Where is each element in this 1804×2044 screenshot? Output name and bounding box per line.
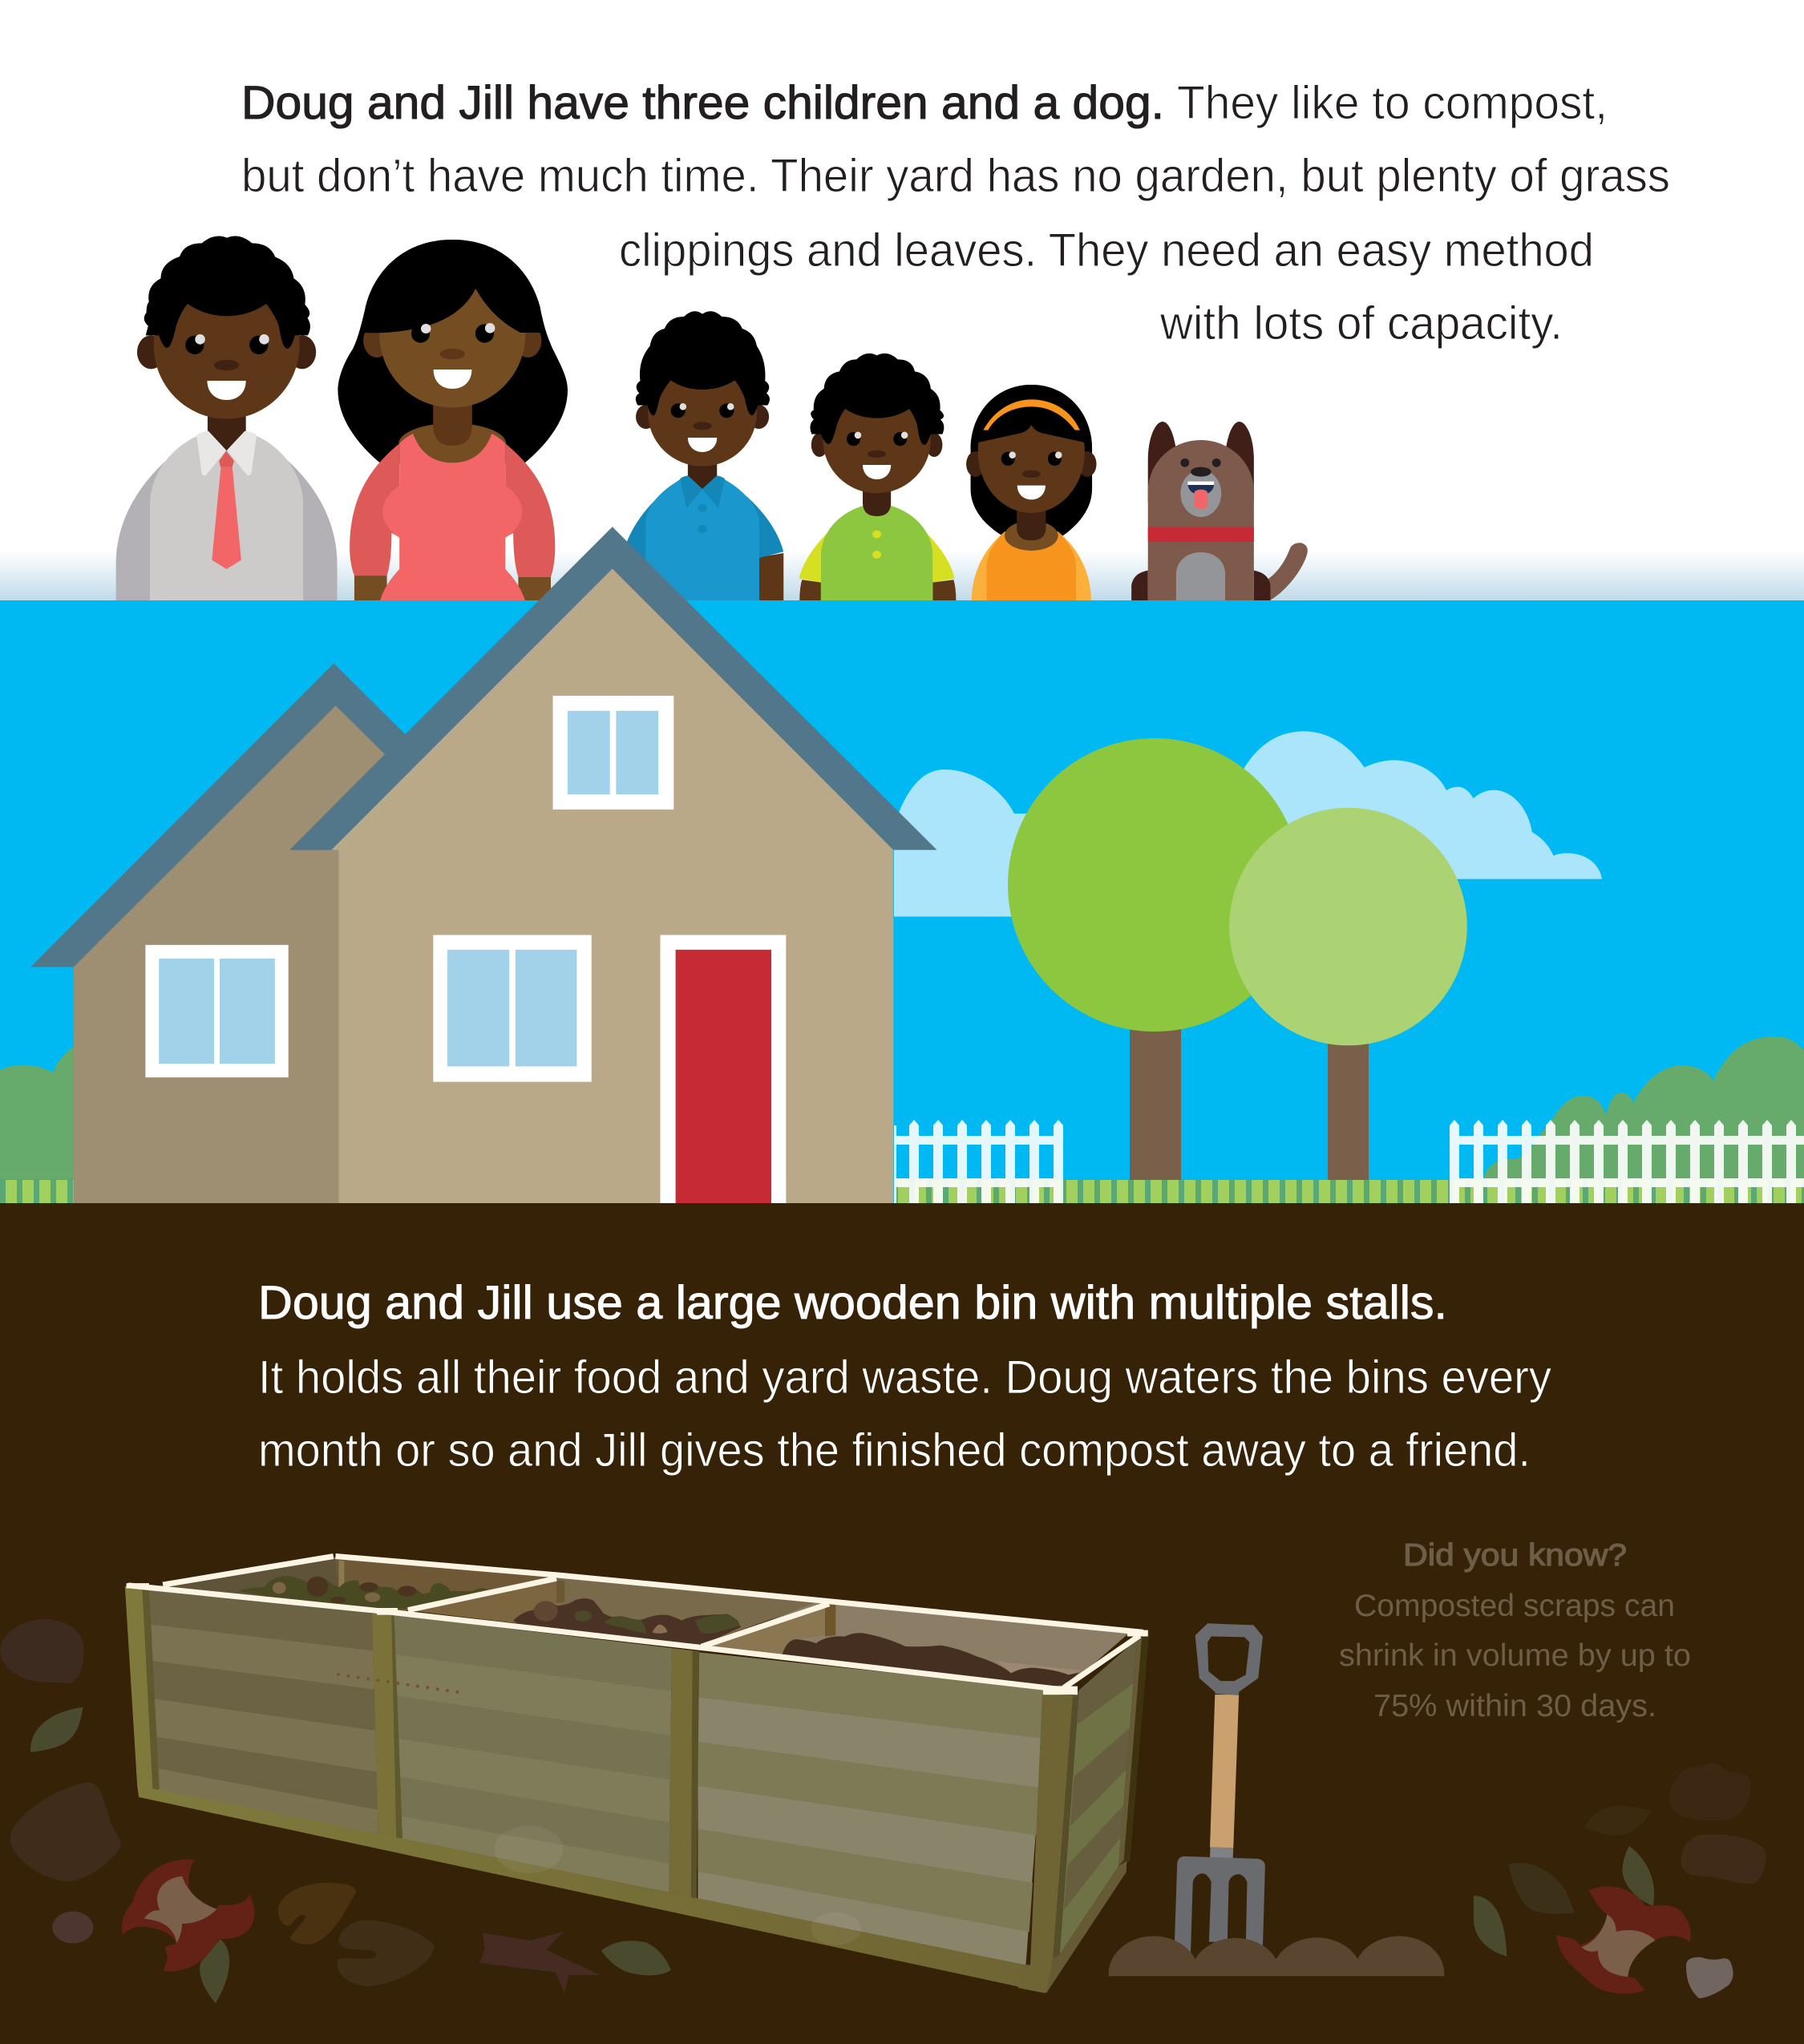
posts	[125, 1586, 699, 1899]
grass	[0, 1180, 1804, 1203]
rocks and leaves	[0, 1619, 121, 1944]
bin text: month or so and Jill gives the finished compost away to a friend.	[258, 1424, 1531, 1476]
digging fork and soil	[1109, 1623, 1444, 1976]
right fence	[1450, 1120, 1804, 1203]
stall 1 interior	[160, 1557, 559, 1611]
did you know callout	[1339, 1538, 1691, 1723]
front panel 1	[147, 1588, 378, 1833]
scraps	[278, 1883, 671, 1994]
top rim	[127, 1557, 1148, 1695]
dog	[1131, 422, 1308, 600]
stall 2 interior	[408, 1577, 822, 1645]
right litter	[1474, 1763, 1766, 1998]
rocks and leaves	[1474, 1763, 1766, 1957]
bottom beam	[137, 1786, 1060, 1993]
front panel 3	[698, 1652, 1046, 1965]
left litter	[0, 1619, 671, 2003]
house	[30, 527, 937, 1203]
intro text: clippings and leaves. They need an easy method	[619, 224, 1594, 277]
sky	[0, 600, 1804, 1203]
pale stone	[1686, 1957, 1733, 1998]
Doug	[116, 236, 338, 600]
gable window	[553, 696, 673, 810]
did you know callout: shrink in volume by up to	[1339, 1638, 1691, 1673]
soil	[1109, 1936, 1444, 1976]
left fence	[894, 1120, 1063, 1203]
intro text: Doug and Jill have three children and a dog.	[241, 77, 1164, 129]
intro text: but don’t have much time. Their yard has no garden, but plenty of grass	[241, 150, 1670, 202]
Jill	[338, 240, 568, 600]
right corner and side panel	[1018, 1633, 1149, 1994]
older boy	[625, 311, 783, 600]
intro text: They like to compost,	[1177, 77, 1608, 129]
fork	[1175, 1623, 1265, 1956]
compost bin	[125, 1557, 1149, 1994]
stall 3 interior	[702, 1601, 1131, 1687]
trees	[1008, 738, 1467, 1180]
ground	[0, 1203, 1804, 2044]
girl	[966, 385, 1097, 600]
side wing	[30, 664, 417, 1203]
bin text	[258, 1277, 1551, 1476]
intro text: with lots of capacity.	[1159, 297, 1563, 349]
bushes	[0, 1036, 1804, 1180]
did you know callout: Did you know?	[1403, 1538, 1627, 1573]
did you know callout: 75% within 30 days.	[1373, 1689, 1656, 1723]
family	[116, 236, 1308, 600]
front window	[433, 935, 592, 1082]
clouds	[894, 731, 1602, 917]
main wall	[331, 569, 893, 1203]
did you know callout: Composted scraps can	[1354, 1589, 1675, 1623]
main roof	[289, 527, 937, 850]
younger boy	[799, 353, 956, 600]
front panel 2	[393, 1615, 672, 1893]
intro text	[241, 77, 1670, 349]
bin text: It holds all their food and yard waste. Doug waters the bins every	[258, 1351, 1551, 1404]
worn patches	[494, 1826, 861, 1945]
door	[660, 935, 786, 1203]
wing window	[145, 945, 289, 1077]
apple core	[1556, 1886, 1691, 1994]
apple core	[122, 1860, 254, 2003]
bin text: Doug and Jill use a large wooden bin with multiple stalls.	[258, 1277, 1447, 1329]
dotted line	[338, 1674, 458, 1692]
front of bin	[125, 1586, 1060, 1993]
